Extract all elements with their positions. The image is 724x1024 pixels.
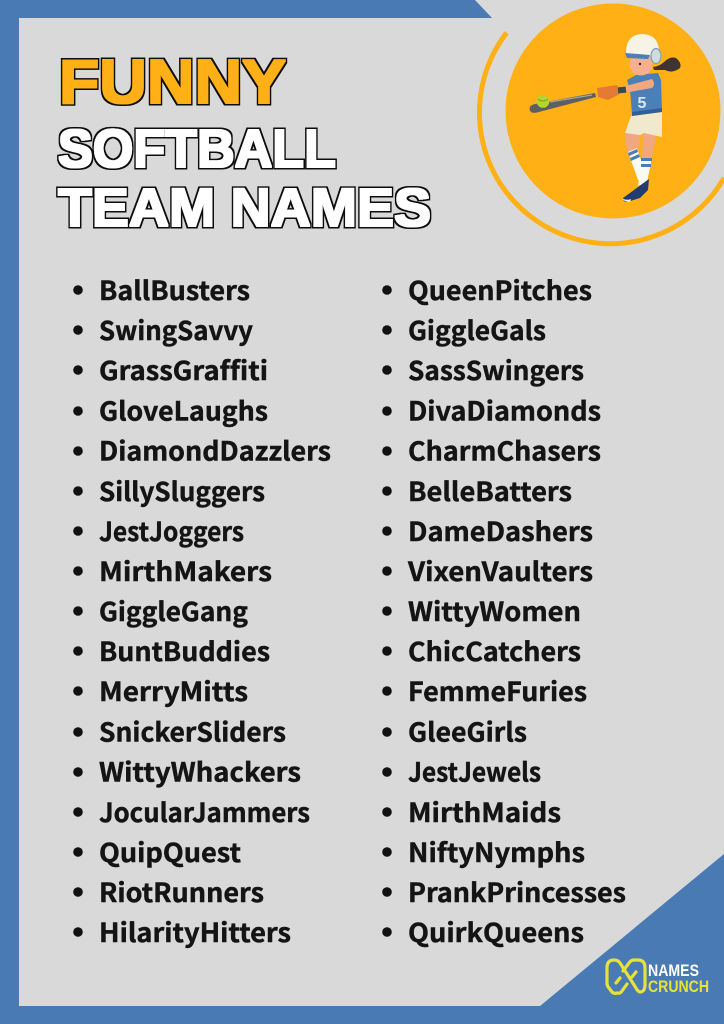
icon: logo N mark — [607, 960, 645, 993]
item: FemmeFuries — [408, 672, 587, 709]
item: DameDashers — [408, 512, 593, 549]
decorative arc around circle — [479, 33, 724, 244]
text: CRUNCH: CRUNCH — [648, 977, 709, 996]
text: NAMES: NAMES — [648, 961, 699, 980]
item: BelleBatters — [408, 472, 572, 509]
list: right column — [382, 271, 626, 950]
title — [58, 48, 431, 238]
item: GiggleGang — [99, 592, 248, 629]
item: SassSwingers — [408, 351, 584, 388]
heading: FUNNY: FUNNY — [59, 48, 286, 117]
item: SillySluggers — [99, 472, 265, 509]
item: MerryMitts — [99, 672, 248, 709]
item: WittyWomen — [408, 592, 581, 629]
item: MirthMakers — [99, 552, 272, 589]
heading: SOFTBALL: SOFTBALL — [58, 119, 336, 179]
item: RiotRunners — [99, 873, 264, 910]
item: PrankPrincesses — [408, 873, 626, 910]
item: BallBusters — [99, 271, 250, 308]
item: SwingSavvy — [99, 311, 253, 348]
item: ChicCatchers — [408, 632, 581, 669]
item: DivaDiamonds — [408, 392, 601, 428]
item: CharmChasers — [408, 432, 601, 468]
item: WittyWhackers — [99, 752, 301, 790]
item: MirthMaids — [408, 793, 561, 830]
heading: TEAM NAMES: TEAM NAMES — [58, 178, 431, 238]
item: BuntBuddies — [99, 632, 270, 669]
item: JestJoggers — [99, 512, 244, 549]
item: QueenPitches — [408, 271, 592, 308]
item: SnickerSliders — [99, 712, 286, 750]
item: DiamondDazzlers — [99, 432, 331, 468]
yellow circle — [506, 4, 720, 218]
item: JestJewels — [408, 752, 541, 790]
icon: softball batter illustration: 5 — [638, 95, 647, 112]
item: GleeGirls — [408, 712, 527, 750]
item: HilarityHitters — [99, 913, 291, 950]
item: QuipQuest — [99, 833, 241, 870]
item: QuirkQueens — [408, 913, 584, 950]
list: left column — [73, 271, 331, 950]
item: GloveLaughs — [99, 392, 268, 428]
item: GiggleGals — [408, 311, 546, 348]
logo: Names Crunch — [607, 960, 709, 996]
icon: softball batter illustration — [530, 34, 680, 202]
item: JocularJammers — [99, 793, 310, 830]
item: GrassGraffiti — [99, 351, 268, 388]
item: NiftyNymphs — [408, 833, 585, 870]
item: VixenVaulters — [407, 552, 593, 589]
